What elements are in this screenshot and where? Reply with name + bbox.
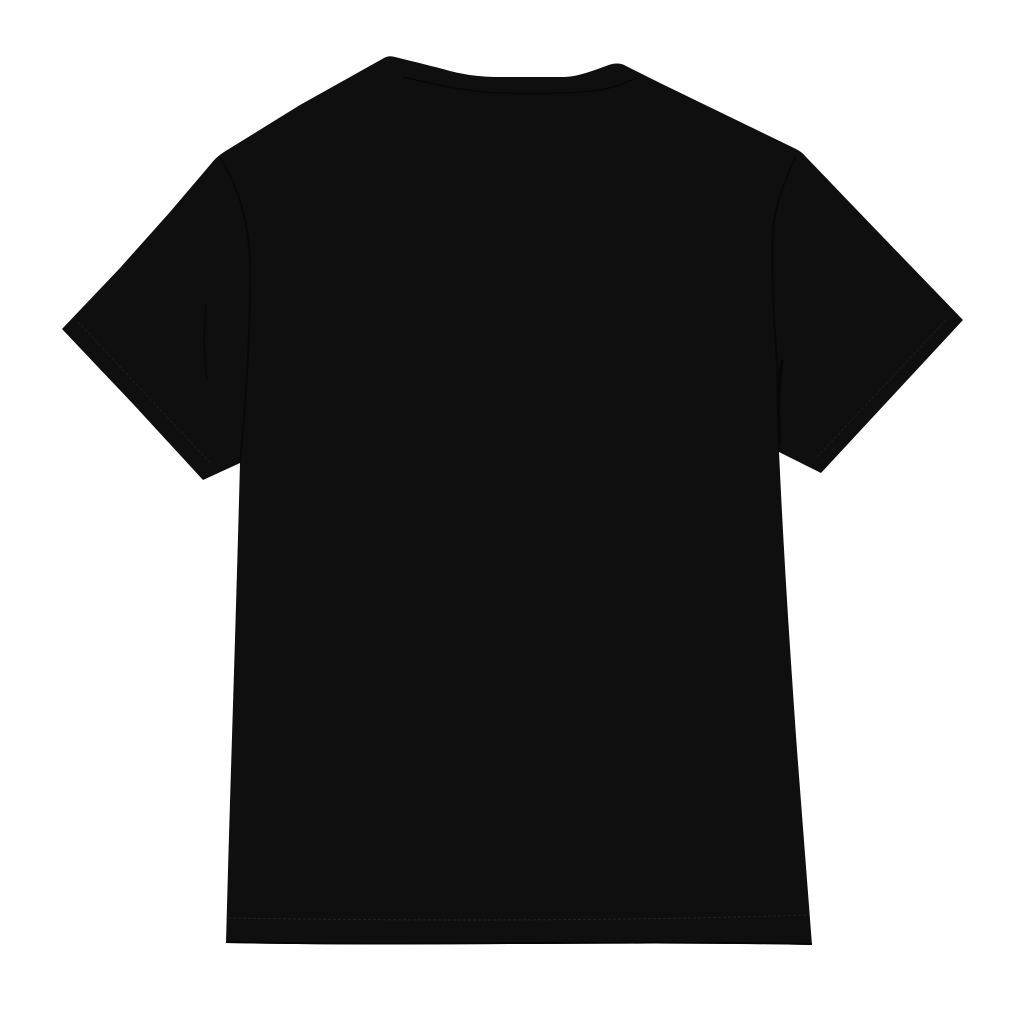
right sleeve seam [772, 156, 796, 452]
right sleeve hem stitch [816, 320, 946, 458]
bottom hem stitch [228, 915, 809, 920]
t-shirt back view [62, 56, 963, 945]
bottom hem edge [226, 942, 812, 944]
left underarm fold [204, 305, 207, 380]
left sleeve seam [219, 156, 250, 463]
left sleeve hem stitch [78, 322, 212, 465]
right underarm fold [779, 360, 782, 445]
collar seam [403, 77, 636, 94]
shirt body and sleeves [62, 56, 963, 945]
